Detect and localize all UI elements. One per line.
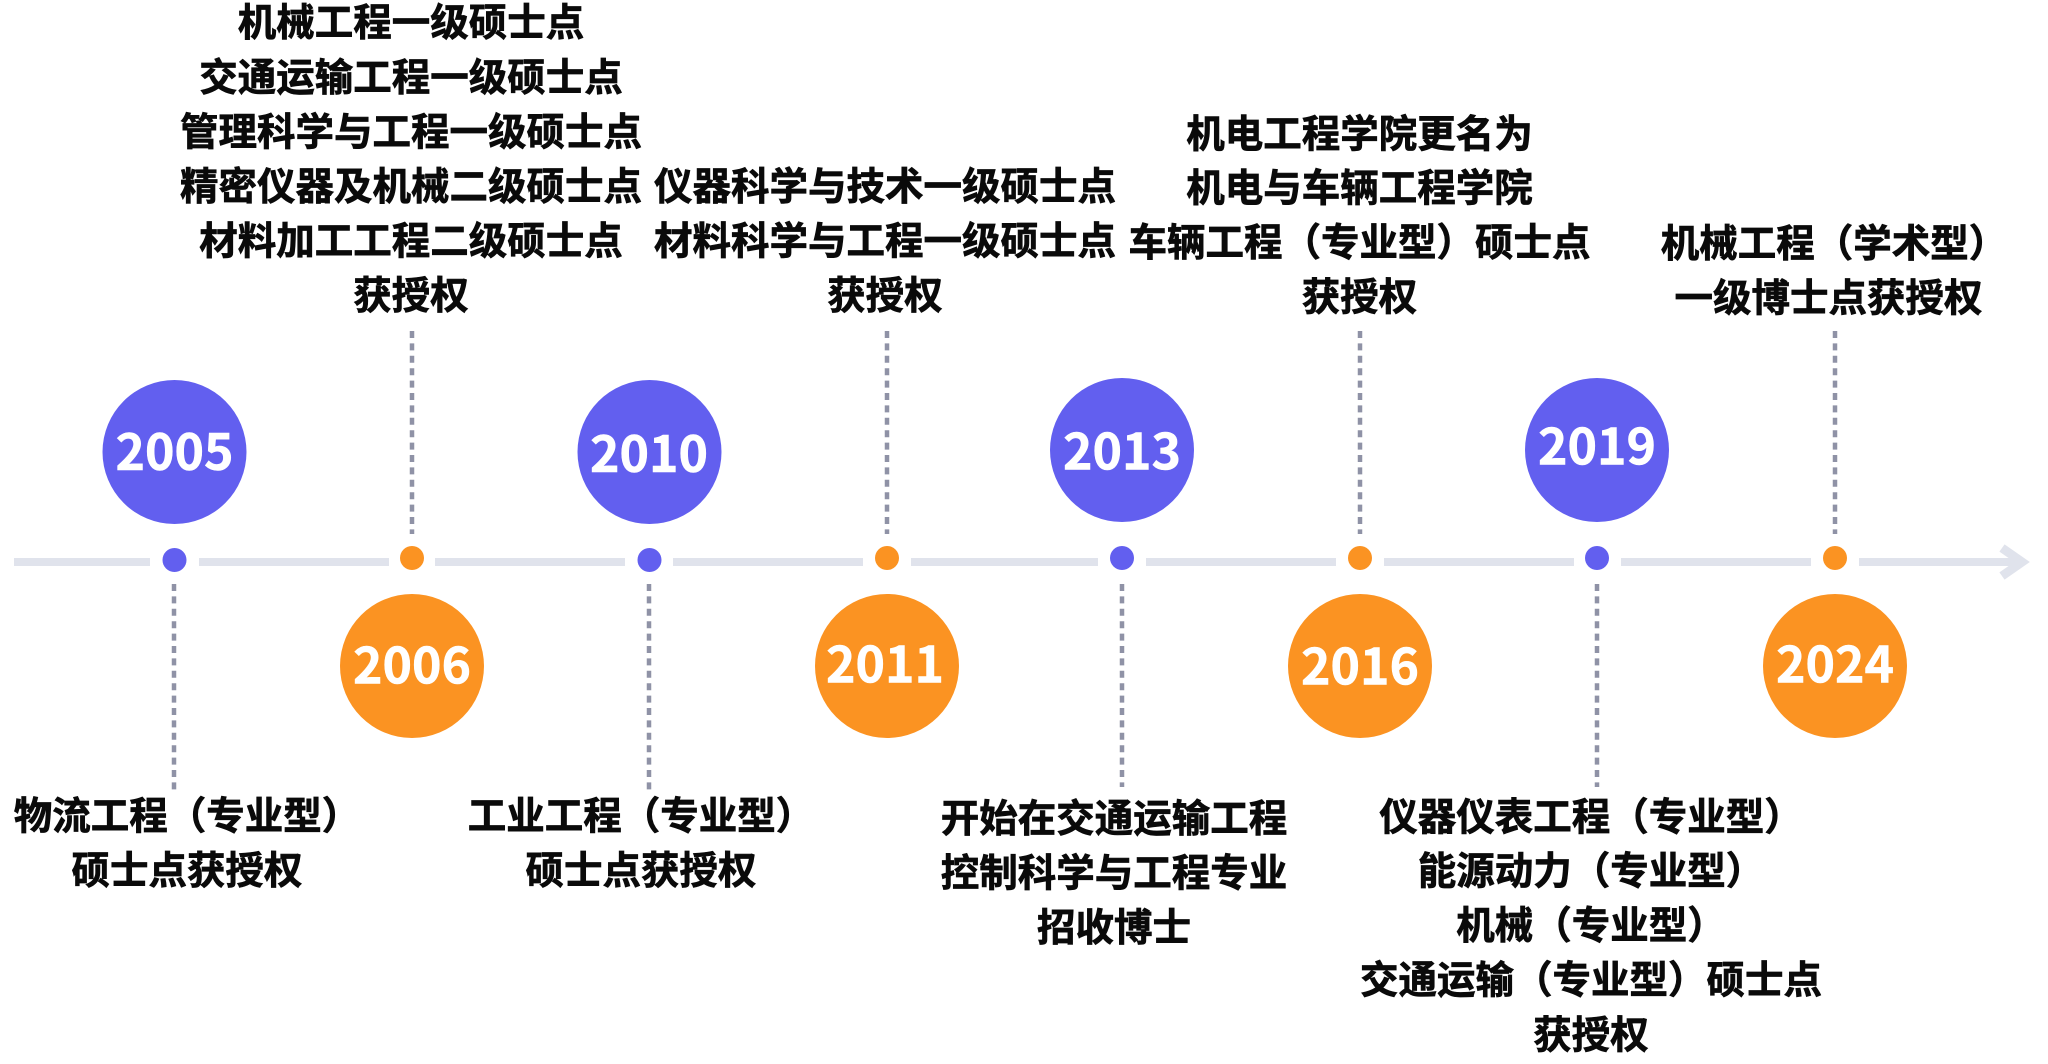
milestone 2013: 开始在交通运输工程	[941, 798, 1287, 841]
milestone 2010: 硕士点获授权	[525, 850, 757, 893]
milestone 2016	[1128, 114, 1591, 738]
timeline axis with arrow	[14, 548, 2024, 576]
milestone 2010: 2010	[590, 415, 708, 487]
milestone 2005: 物流工程（专业型）	[14, 796, 360, 838]
milestone 2019: 能源动力（专业型）	[1418, 850, 1764, 894]
milestone 2006: 2006	[353, 626, 471, 698]
milestone 2011: 材料科学与工程一级硕士点	[654, 220, 1116, 264]
milestone 2024: 一级博士点获授权	[1674, 278, 1983, 320]
milestone 2016: 获授权	[1302, 276, 1417, 320]
milestone 2024: 2024	[1776, 626, 1894, 698]
milestone 2006	[180, 2, 642, 738]
milestone 2013: 控制科学与工程专业	[941, 852, 1287, 896]
milestone 2005: 2005	[116, 413, 234, 485]
milestone 2013	[941, 378, 1287, 950]
milestone 2010: 工业工程（专业型）	[468, 796, 814, 838]
milestone 2013: 招收博士	[1037, 907, 1191, 950]
milestone 2024: 机械工程（学术型）	[1661, 223, 2007, 266]
milestone 2013: 2013	[1063, 412, 1181, 484]
milestone 2011: 仪器科学与技术一级硕士点	[654, 166, 1116, 209]
milestone 2019: 仪器仪表工程（专业型）	[1379, 796, 1803, 840]
milestone 2010	[468, 380, 814, 893]
milestone 2016: 2016	[1301, 628, 1419, 700]
milestone 2006: 精密仪器及机械二级硕士点	[180, 166, 642, 209]
milestone 2006: 获授权	[353, 275, 469, 318]
milestone 2019: 2019	[1538, 408, 1656, 480]
milestone 2011: 2011	[826, 626, 944, 698]
milestone 2005: 硕士点获授权	[71, 850, 303, 893]
milestone 2016: 机电工程学院更名为	[1186, 114, 1533, 156]
milestone 2006: 材料加工工程二级硕士点	[199, 220, 623, 264]
milestone 2006: 管理科学与工程一级硕士点	[180, 112, 642, 154]
milestone 2024	[1661, 223, 2007, 738]
milestone 2019: 机械（专业型）	[1456, 905, 1726, 948]
milestone 2011: 获授权	[827, 275, 943, 318]
milestone 2019: 交通运输（专业型）硕士点	[1360, 960, 1822, 1002]
milestone 2011	[654, 166, 1116, 738]
milestone 2006: 交通运输工程一级硕士点	[199, 57, 623, 100]
milestone 2019: 获授权	[1533, 1014, 1649, 1058]
milestone 2006: 机械工程一级硕士点	[238, 2, 584, 45]
milestone 2016: 车辆工程（专业型）硕士点	[1128, 222, 1591, 265]
milestone 2016: 机电与车辆工程学院	[1186, 168, 1533, 210]
milestone 2019	[1360, 378, 1822, 1058]
milestone 2005	[14, 380, 360, 893]
